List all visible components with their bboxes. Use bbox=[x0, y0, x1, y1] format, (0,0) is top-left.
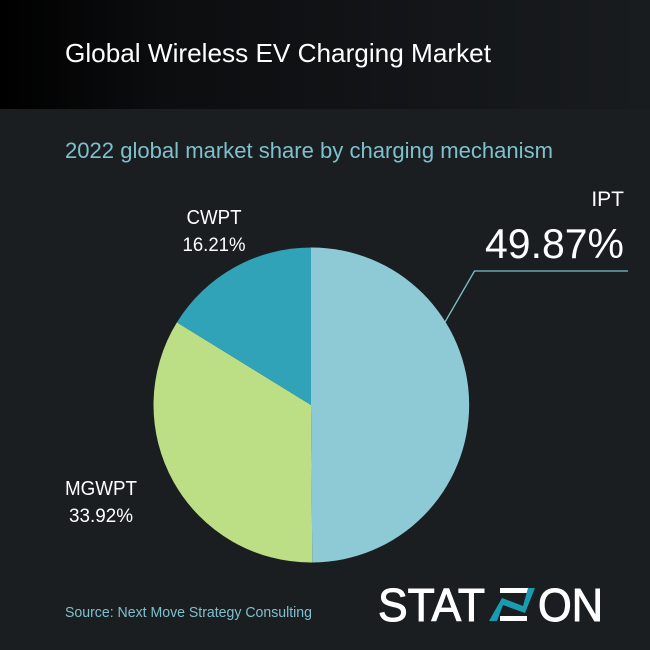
slice: CWPT bbox=[177, 248, 311, 405]
logo: Statzon: ON bbox=[538, 579, 603, 631]
value: IPT: 49.87% bbox=[485, 220, 624, 267]
slice: IPT bbox=[311, 247, 469, 562]
label: IPT: IPT bbox=[591, 188, 624, 211]
label: IPT bbox=[485, 188, 624, 267]
slice: MGWPT bbox=[153, 322, 312, 563]
pie chart bbox=[153, 247, 469, 563]
label: CWPT bbox=[182, 207, 246, 256]
label: MGWPT: MGWPT bbox=[65, 478, 137, 500]
title: Global Wireless EV Charging Market bbox=[65, 38, 492, 68]
source note: Source: Next Move Strategy Consulting bbox=[65, 604, 312, 621]
subtitle: 2022 global market share by charging mechanism bbox=[65, 138, 553, 163]
logo: Statzon bbox=[378, 579, 603, 631]
logo: Statzon: STAT bbox=[378, 579, 485, 631]
header band bbox=[0, 0, 650, 109]
leader line: IPT bbox=[445, 271, 628, 322]
logo mark: Z with teal trend line bbox=[489, 588, 535, 621]
value: MGWPT: 33.92% bbox=[69, 506, 133, 527]
label: CWPT: CWPT bbox=[186, 207, 242, 229]
label: MGWPT bbox=[65, 478, 137, 527]
value: CWPT: 16.21% bbox=[182, 235, 246, 256]
